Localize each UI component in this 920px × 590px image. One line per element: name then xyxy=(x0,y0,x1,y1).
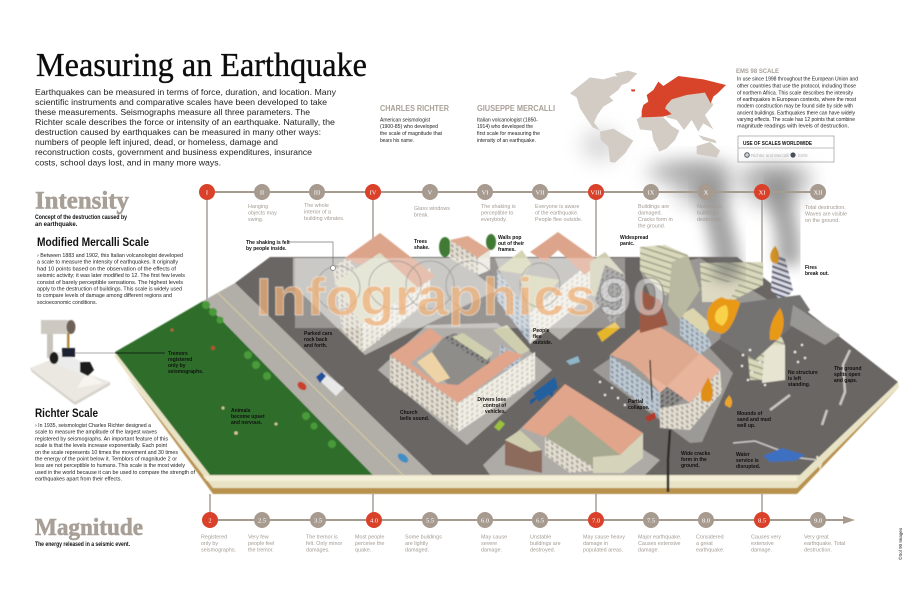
earthquake ground scene xyxy=(115,232,899,494)
magnitude descriptions: seismographs. xyxy=(201,548,236,554)
magnitude descriptions: earthquake. xyxy=(696,548,724,554)
scene callouts xyxy=(231,235,862,470)
magnitude markers: 3.5 xyxy=(314,518,322,524)
text block: Richter Scale: registered by seismographs. An important feature of this xyxy=(35,436,168,442)
magnitude markers xyxy=(202,512,826,528)
legend: use of scales worldwide: EMS xyxy=(798,153,808,158)
magnitude descriptions: Some buildings xyxy=(405,534,442,540)
callout: tremors: only by xyxy=(168,363,186,369)
block collapse parcel xyxy=(593,313,733,443)
panel: Charles Richter: the scale of magnitude that xyxy=(380,131,442,137)
intensity descriptions: Total destruction. xyxy=(805,205,846,211)
callout: walls pop: frames. xyxy=(498,247,516,253)
callout: animals: and nervous. xyxy=(231,420,263,426)
ground: asphalt xyxy=(235,257,898,475)
magnitude descriptions: destroyed. xyxy=(530,548,555,554)
magnitude markers: 6.0 xyxy=(481,518,489,524)
callout: no structure: No structure xyxy=(788,370,818,376)
magnitude markers: 7.0 xyxy=(592,518,600,524)
heading: Magnitude: The energy released in a seismic event. xyxy=(35,542,130,548)
panel: EMS 98 scale: In use since 1998 throughout the European Union and xyxy=(737,77,858,83)
text block: Richter Scale: scale to measure the amplitude of the largest waves xyxy=(35,430,157,436)
intensity markers: IV xyxy=(370,190,377,196)
intensity descriptions: on the ground. xyxy=(805,218,840,224)
panel: EMS 98 scale: of northern Africa. This scale describes the intensity xyxy=(737,90,853,96)
text block: Modified Mercalli Scale: a scale to measure the intensity of earthquakes. It originally xyxy=(37,260,178,266)
heading: Intensity xyxy=(35,188,129,228)
callout: wide cracks: Wide cracks xyxy=(681,451,710,457)
callout: wide cracks: ground. xyxy=(681,463,700,469)
animals xyxy=(170,328,278,435)
magnitude markers: 8.5 xyxy=(758,518,766,524)
callout: ground splits: splits open xyxy=(834,372,860,378)
magnitude descriptions: people feel xyxy=(248,541,274,547)
magnitude timeline xyxy=(201,512,855,554)
intro paragraph: Earthquakes can be measured in terms of force, duration, and location. Many xyxy=(35,87,337,97)
intensity descriptions: The shaking is xyxy=(481,204,516,210)
panel: Charles Richter: (1900-85) who developed xyxy=(380,124,438,130)
intensity descriptions: everybody. xyxy=(481,217,507,223)
heading: Magnitude: Magnitude xyxy=(35,515,143,541)
callout: water: disrupted. xyxy=(736,464,761,470)
text block: Richter Scale: › In 1935, seismologist Charles Richter designed a xyxy=(35,423,151,429)
intensity descriptions: break. xyxy=(414,212,429,218)
intensity markers: X xyxy=(704,190,709,196)
burning tower xyxy=(745,253,793,383)
cream stacked buildings xyxy=(640,245,763,320)
magnitude descriptions: Very great xyxy=(804,534,829,540)
callout: ground splits: and gaps. xyxy=(834,378,858,384)
magnitude descriptions: destruction. xyxy=(804,548,832,554)
magnitude markers: 8.0 xyxy=(702,518,710,524)
magnitude descriptions: damage. xyxy=(481,548,502,554)
callout: people flee: People xyxy=(533,328,550,334)
intro paragraph: scientific instruments and comparative scales have been developed to take xyxy=(35,97,327,107)
watermark rings xyxy=(316,261,560,310)
panel: EMS 98 scale: ancient buildings. Earthquakes there can have widely xyxy=(737,110,855,116)
panel: Giuseppe Mercalli: intensity of an earthquake. xyxy=(477,138,536,144)
callout: ground splits: The ground xyxy=(834,366,862,372)
legend: use of scales worldwide xyxy=(738,136,834,162)
magnitude descriptions: damaged. xyxy=(405,548,429,554)
intensity markers: XII xyxy=(813,190,823,196)
intensity descriptions: perceptible to xyxy=(481,210,513,216)
panel: Giuseppe Mercalli: Italian volcanologist (1850- xyxy=(477,118,538,124)
callout: partial collapse: Partial xyxy=(628,399,644,405)
magnitude descriptions: buildings are xyxy=(530,541,561,547)
magnitude descriptions: earthquake. Total xyxy=(804,541,845,547)
panel: Charles Richter: American seismologist xyxy=(380,118,430,124)
intensity timeline xyxy=(199,184,847,230)
magnitude markers: 4.0 xyxy=(370,518,378,524)
text block: Richter Scale: earthquakes apart from their effects. xyxy=(35,477,122,483)
callout: shaking felt: by people inside. xyxy=(246,246,287,252)
magnitude descriptions: damages. xyxy=(306,548,330,554)
watermark number: 90 xyxy=(598,268,666,327)
text block: Richter Scale xyxy=(35,406,195,483)
magnitude markers: 2.5 xyxy=(258,518,266,524)
intensity descriptions: Cracks form in xyxy=(638,217,673,223)
text block: Richter Scale: less are not perceptible to humans. This scale is the most widely xyxy=(35,463,185,469)
timeline stems: intensity xyxy=(207,192,762,302)
intensity descriptions: damaged. xyxy=(638,210,662,216)
callout: mounds: sand and mud xyxy=(737,417,771,423)
intensity markers xyxy=(199,184,826,200)
arrow xyxy=(843,516,855,524)
panel: EMS 98 scale: of earthquakes in European contexts, where the most xyxy=(737,97,856,103)
intensity descriptions: Everyone is aware xyxy=(535,204,579,210)
magnitude descriptions: damage. xyxy=(638,548,659,554)
magnitude markers: 7.5 xyxy=(647,518,655,524)
block center parcel xyxy=(378,323,552,445)
callout: mounds: Mounds of xyxy=(737,411,763,417)
panel: Giuseppe Mercalli: GIUSEPPE MERCALLI xyxy=(477,104,555,113)
callout: widespread panic: panic. xyxy=(620,241,635,247)
callout: shaking felt xyxy=(246,240,336,270)
building A2 xyxy=(450,236,490,275)
magnitude descriptions: severe xyxy=(481,541,497,547)
magnitude descriptions: Registered xyxy=(201,534,227,540)
intro paragraph: these measurements. Seismographs measure all three parameters. The xyxy=(35,107,310,117)
magnitude descriptions: only by xyxy=(201,541,218,547)
text block: Modified Mercalli Scale: apply to the destruction of buildings. This scale is widely used xyxy=(37,286,182,292)
legend: use of scales worldwide: Richter and Mercalli xyxy=(751,153,789,158)
intensity descriptions: swing. xyxy=(248,217,263,223)
magnitude descriptions: damage. xyxy=(751,548,772,554)
intensity markers: VI xyxy=(482,190,488,196)
callout: shaking felt: The shaking is felt xyxy=(246,240,290,246)
panel: EMS 98 scale: other countries that use the protocol, including those xyxy=(737,84,856,90)
text block: Modified Mercalli Scale: had 10 points based on the observation of the effects of xyxy=(37,266,177,272)
intro paragraph: costs, school days lost, and in many more ways. xyxy=(35,158,221,168)
text block: Modified Mercalli Scale: socioeconomic conditions. xyxy=(37,300,97,306)
intensity descriptions: the ground. xyxy=(638,224,665,230)
magnitude descriptions: damage in xyxy=(583,541,608,547)
heading: Intensity: an earthquake. xyxy=(35,222,78,228)
text block: Modified Mercalli Scale xyxy=(37,235,185,306)
callout: partial collapse: collapse. xyxy=(628,405,650,411)
intro paragraph: destruction caused by earthquakes can be measured in many other ways: xyxy=(35,127,321,137)
magnitude markers: 2 xyxy=(208,518,212,524)
callout: trees shake: Trees xyxy=(414,239,427,245)
intensity descriptions xyxy=(248,203,847,230)
trees behind block A xyxy=(439,234,496,257)
callout: no structure: is left xyxy=(788,376,801,382)
callout: wide cracks: form in the xyxy=(681,457,707,463)
intensity descriptions: Hanging xyxy=(248,204,268,210)
text block: Modified Mercalli Scale: to compare levels of damage among different regions and xyxy=(37,293,172,299)
intro paragraph: reconstruction costs, government and business expenditures, insurance xyxy=(35,147,312,157)
callout: water: Water xyxy=(736,452,750,458)
magnitude descriptions: Unstable xyxy=(530,534,551,540)
heading: Intensity: Intensity xyxy=(35,188,129,214)
callout: animals: become upset xyxy=(231,414,265,420)
watermark veil xyxy=(295,258,625,328)
intro paragraph: Richter scale describes the force or intensity of an earthquake. Naturally, the xyxy=(35,117,335,127)
callout: church bells: Church xyxy=(400,410,418,416)
slab: side layers xyxy=(115,352,899,494)
panel: EMS 98 scale: magnitude readings with levels of destruction. xyxy=(737,124,849,130)
callout: no structure: standing. xyxy=(788,382,811,388)
callout: tremors xyxy=(75,351,204,375)
panel: EMS 98 scale xyxy=(736,68,858,130)
magnitude descriptions: Most people xyxy=(355,534,384,540)
trees along road xyxy=(202,301,336,448)
callout: drivers: control of xyxy=(483,403,506,409)
building A xyxy=(333,233,435,352)
callout: parked cars: Parked cars xyxy=(304,331,333,337)
text block: Richter Scale: the energy of the point below it. Temblors of magnitude 2 or xyxy=(35,456,177,462)
vehicles on road xyxy=(296,372,410,464)
text block: Richter Scale: used in the world because it can be used to compare the strength of xyxy=(35,470,195,476)
callout: tremors: seismographs. xyxy=(168,369,204,375)
ground: grass field xyxy=(115,301,373,475)
intensity markers: VIII xyxy=(590,190,602,196)
intensity markers: IX xyxy=(648,190,655,196)
vehicles in town xyxy=(494,322,656,431)
panel: Charles Richter: bears his name. xyxy=(380,138,414,144)
magnitude markers: 9.0 xyxy=(814,518,822,524)
intensity descriptions: Glass windows xyxy=(414,206,450,212)
intensity descriptions: destroyed. xyxy=(697,217,722,223)
building lower xyxy=(505,384,643,473)
title: Measuring an Earthquake xyxy=(36,47,367,84)
callout: tremors: registered xyxy=(168,357,192,363)
magnitude descriptions: Major earthquake. xyxy=(638,534,681,540)
callout: church bells: bells sound. xyxy=(400,416,430,422)
road xyxy=(203,283,432,475)
intensity markers: XI xyxy=(759,190,765,196)
callout: drivers: Drivers lose xyxy=(477,397,506,403)
magnitude descriptions: extensive xyxy=(751,541,774,547)
block lower parcel xyxy=(483,395,660,475)
panel: Charles Richter: CHARLES RICHTER xyxy=(380,104,449,113)
credit: ©Sol 90 Images xyxy=(897,527,903,560)
magnitude descriptions: Causes extensive xyxy=(638,541,681,547)
heading: Intensity: Concept of the destruction caused by xyxy=(35,215,128,221)
intensity markers: II xyxy=(260,190,264,196)
rubble and ground cracks, right xyxy=(599,295,850,492)
intensity descriptions: The whole xyxy=(304,203,329,209)
intensity descriptions: building vibrates. xyxy=(304,216,344,222)
intro paragraph: numbers of people left injured, dead, or homeless, damage and xyxy=(35,137,278,147)
block top-right parcel xyxy=(640,258,768,355)
world map xyxy=(570,71,726,163)
magnitude descriptions: a great xyxy=(696,541,713,547)
intensity descriptions: Numerous xyxy=(697,204,722,210)
panel: EMS 98 scale: varying effects. The scale has 12 points that combine xyxy=(737,117,855,123)
panel: EMS 98 scale: modern construction may be found side by side with xyxy=(737,104,853,110)
text block: Modified Mercalli Scale: seismic activity; it was later modified to 12. The first few levels xyxy=(37,273,185,279)
building B2 xyxy=(497,232,625,344)
callout: water: service is xyxy=(736,458,759,464)
callout: fires: break out. xyxy=(805,271,830,277)
panel: Giuseppe Mercalli: first scale for measuring the xyxy=(477,131,540,137)
intensity descriptions: People flee outside. xyxy=(535,217,582,223)
intensity descriptions: objects may xyxy=(248,210,277,216)
block A parcel xyxy=(293,258,497,355)
text block: Modified Mercalli Scale: consist of barely perceptible sensations. The highest levels xyxy=(37,280,183,286)
magnitude markers: 5.5 xyxy=(426,518,434,524)
building collapse side xyxy=(610,290,722,430)
magnitude descriptions: the tremor. xyxy=(248,548,274,554)
callout: people flee: flee xyxy=(533,334,542,340)
magnitude descriptions: May cause xyxy=(481,534,507,540)
intensity descriptions: Buildings are xyxy=(638,204,669,210)
text block: Modified Mercalli Scale: › Between 1883 and 1902, this Italian volcanologist developed xyxy=(37,253,183,259)
panel: Giuseppe Mercalli: 1914) who developed the xyxy=(477,124,533,130)
callout: parked cars: and forth. xyxy=(304,343,328,349)
intensity descriptions: of the earthquake. xyxy=(535,210,578,216)
intensity markers: V xyxy=(428,190,433,196)
intro paragraph xyxy=(35,87,337,168)
callout: fires: Fires xyxy=(805,265,817,271)
text block: Richter Scale: Richter Scale xyxy=(35,406,98,420)
intensity descriptions: Waves are visible xyxy=(805,212,847,218)
fires xyxy=(701,246,784,408)
magnitude descriptions xyxy=(201,534,845,554)
block B2 parcel (upper middle) xyxy=(495,258,625,340)
magnitude descriptions: May cause heavy xyxy=(583,534,625,540)
magnitude markers: 6.5 xyxy=(536,518,544,524)
magnitude timeline stems xyxy=(210,494,762,520)
text block: Richter Scale: scale is that the levels increase exponentially. Each point xyxy=(35,443,167,449)
panel: EMS 98 scale: EMS 98 SCALE xyxy=(736,68,780,75)
icon: seismograph xyxy=(30,320,110,405)
watermark text: Infographics xyxy=(256,268,596,327)
callout: walls pop: out of their xyxy=(498,241,524,247)
callout: parked cars: rock back xyxy=(304,337,328,343)
magnitude descriptions: The tremor is xyxy=(306,534,338,540)
intensity markers: III xyxy=(314,190,320,196)
magnitude descriptions: are lightly xyxy=(405,541,428,547)
intensity markers: I xyxy=(206,190,208,196)
intensity descriptions: buildings xyxy=(697,210,719,216)
intensity descriptions: interior of a xyxy=(304,210,331,216)
callout: mounds: well up. xyxy=(736,423,756,429)
callout: walls pop: Walls pop xyxy=(498,235,521,241)
callout: trees shake: shake. xyxy=(414,245,430,251)
callout: widespread panic: Widespread xyxy=(620,235,648,241)
legend: use of scales worldwide: USE OF SCALES WORLDWIDE xyxy=(743,141,812,147)
magnitude descriptions: populated areas. xyxy=(583,548,623,554)
panel: Charles Richter xyxy=(380,104,449,144)
magnitude descriptions: felt. Only minor xyxy=(306,541,342,547)
text block: Richter Scale: on the scale represents 10 times the movement and 30 times xyxy=(35,450,178,456)
panel: Giuseppe Mercalli xyxy=(477,104,555,144)
text block: Modified Mercalli Scale: Modified Mercalli Scale xyxy=(37,235,149,249)
map shadow and upper smoke xyxy=(582,129,813,185)
building center xyxy=(390,325,535,432)
callout: people flee: outside. xyxy=(533,340,553,346)
callout: drivers: vehicles. xyxy=(485,409,507,415)
callout: animals: Animals xyxy=(231,408,251,414)
callout: tremors: Tremors xyxy=(168,351,188,357)
magnitude descriptions: quake. xyxy=(355,548,371,554)
magnitude descriptions: perceive the xyxy=(355,541,384,547)
magnitude descriptions: Causes very xyxy=(751,534,781,540)
smoke plumes xyxy=(675,168,805,280)
magnitude descriptions: Very few xyxy=(248,534,269,540)
magnitude descriptions: Considered xyxy=(696,534,724,540)
intensity markers: VII xyxy=(535,190,545,196)
